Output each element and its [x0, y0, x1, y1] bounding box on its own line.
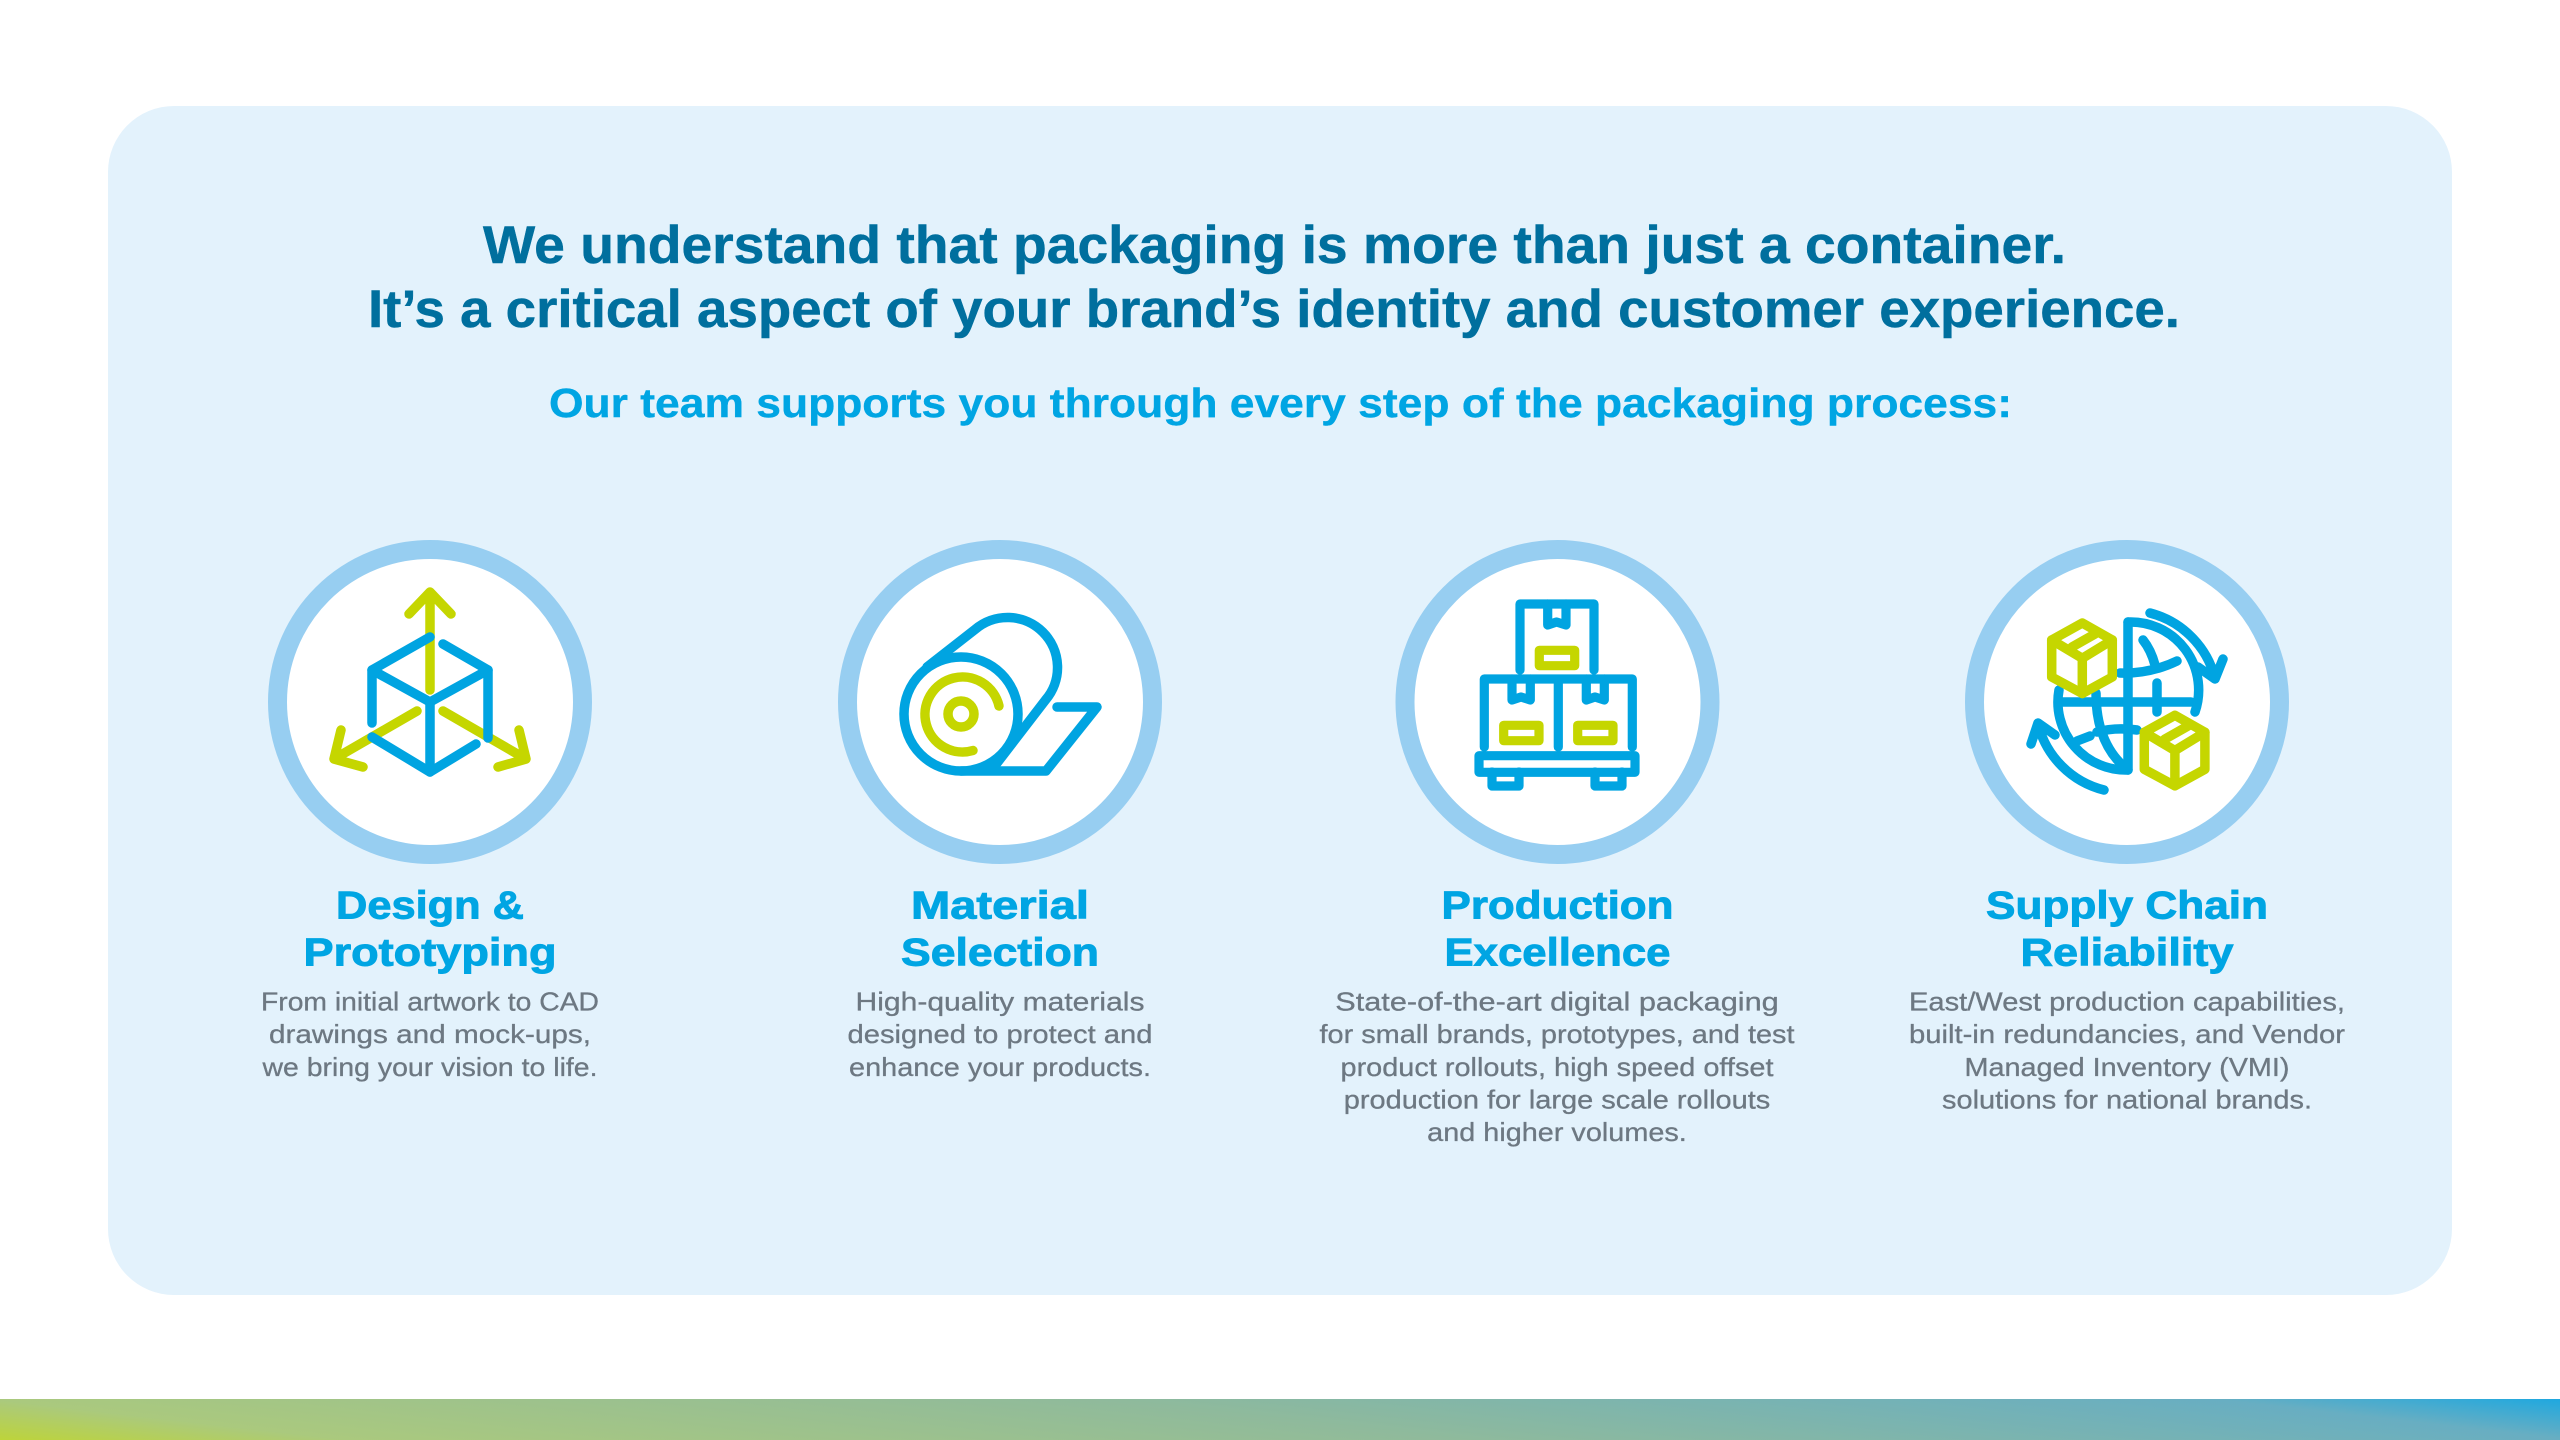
description: production excellence: production for large scale rollouts	[1344, 1084, 1770, 1114]
description: design and prototyping	[261, 986, 599, 1082]
description: supply chain reliability	[1909, 986, 2345, 1114]
title: supply chain reliability: Supply Chain	[1986, 884, 2268, 928]
description: supply chain reliability: Managed Inventory (VMI)	[1964, 1052, 2290, 1082]
description: supply chain reliability: solutions for national brands.	[1942, 1084, 2312, 1114]
description: material selection: High-quality materials	[856, 986, 1144, 1016]
panel: design and prototyping	[261, 550, 599, 1082]
title: design and prototyping: Prototyping	[304, 932, 556, 974]
heading: It’s a critical aspect of your brand’s identity and customer experience.	[368, 280, 2180, 339]
description: material selection: designed to protect and	[848, 1019, 1152, 1049]
icon: material roll	[848, 550, 1152, 854]
panel: supply chain reliability	[1909, 550, 2345, 1114]
bottom gradient bar	[0, 1399, 2560, 1440]
heading: We understand that packaging is more than just a container.	[483, 216, 2066, 275]
title: material selection	[901, 884, 1099, 974]
icon: globe with boxes	[1974, 550, 2280, 854]
subheading: Our team supports you through every step of the packaging process:	[549, 380, 2012, 426]
title: production excellence: Excellence	[1444, 932, 1670, 974]
description: material selection: enhance your products.	[849, 1052, 1151, 1082]
heading	[368, 216, 2180, 339]
description: design and prototyping: drawings and mock-ups,	[269, 1019, 591, 1049]
description: production excellence: product rollouts, high speed offset	[1340, 1052, 1774, 1082]
description: production excellence: State-of-the-art digital packaging	[1335, 986, 1779, 1016]
panel: production excellence	[1320, 550, 1795, 1147]
description: supply chain reliability: built-in redundancies, and Vendor	[1909, 1019, 2345, 1049]
title: material selection: Material	[911, 884, 1089, 928]
description: design and prototyping: From initial artwork to CAD	[261, 986, 599, 1016]
description: supply chain reliability: East/West production capabilities,	[1909, 986, 2345, 1016]
panel: background card	[108, 106, 2452, 1295]
description: design and prototyping: we bring your vision to life.	[261, 1052, 598, 1082]
title: production excellence	[1442, 884, 1674, 974]
description: production excellence: for small brands, prototypes, and test	[1320, 1019, 1795, 1049]
title: production excellence: Production	[1442, 884, 1674, 928]
title: supply chain reliability	[1986, 884, 2268, 974]
description: production excellence: and higher volumes.	[1427, 1117, 1687, 1147]
description: production excellence	[1320, 986, 1795, 1147]
title: design and prototyping	[304, 884, 556, 974]
title: design and prototyping: Design &	[336, 884, 524, 928]
icon: cube with arrows	[278, 550, 582, 854]
description: material selection	[848, 986, 1152, 1082]
panel: material selection	[848, 550, 1152, 1082]
title: material selection: Selection	[901, 932, 1099, 974]
title: supply chain reliability: Reliability	[2020, 932, 2234, 974]
icon: boxes on pallet	[1405, 550, 1710, 854]
